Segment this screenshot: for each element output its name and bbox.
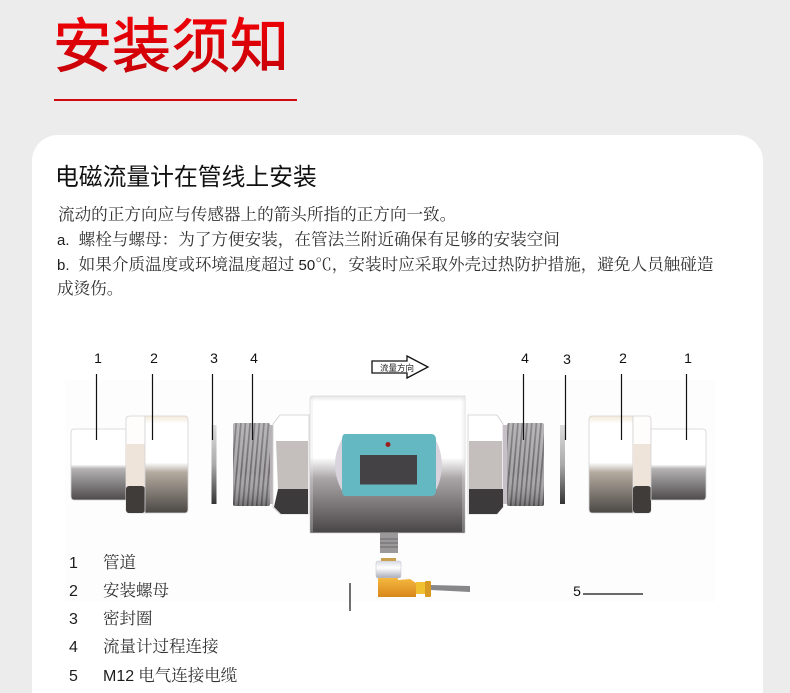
legend list: M12 电气连接电缆	[103, 666, 237, 685]
flow direction arrow: 流量方向	[380, 363, 414, 373]
flowmeter body	[310, 396, 465, 533]
panel: installation card	[32, 135, 763, 693]
text block: instructions: 流动的正方向应与传感器上的箭头所指的正方向一致。	[58, 205, 456, 224]
callout numbers: 5	[573, 583, 581, 599]
legend list: 安装螺母	[103, 581, 169, 600]
title underline	[54, 99, 297, 101]
legend list: 密封圈	[103, 609, 152, 628]
callout numbers: 2	[619, 350, 627, 366]
left thread and hex	[233, 415, 309, 514]
callout numbers: 4	[250, 350, 258, 366]
display panel	[335, 434, 442, 496]
left washer	[212, 425, 216, 504]
right nut and pipe	[589, 416, 706, 513]
right hex and thread	[468, 415, 544, 514]
callout numbers: 1	[94, 350, 102, 366]
callout numbers: 1	[684, 350, 692, 366]
legend list: 管道	[103, 553, 136, 572]
legend list: 流量计过程连接	[103, 637, 218, 656]
photo backdrop	[65, 380, 715, 602]
text block: instructions: a. 螺栓与螺母：为了方便安装，在管法兰附近确保有足够的安装空间	[57, 230, 560, 249]
text block: instructions: 成烫伤。	[57, 279, 123, 298]
callout numbers: 3	[210, 350, 218, 366]
text block: instructions	[57, 205, 713, 298]
panel heading: 电磁流量计在管线上安装	[55, 164, 317, 191]
callout numbers: 3	[563, 351, 571, 367]
legend list: 1	[69, 555, 78, 572]
callout numbers: 4	[521, 350, 529, 366]
legend list: 4	[69, 639, 78, 656]
callout numbers: 2	[150, 350, 158, 366]
right washer	[560, 425, 565, 504]
left pipe and nut	[71, 416, 188, 513]
legend list: 2	[69, 583, 78, 600]
title: 安装须知	[53, 14, 289, 80]
text block: instructions: b. 如果介质温度或环境温度超过 50℃，安装时应采取外壳过热防护措施，避免人员触碰造	[57, 255, 713, 274]
flow direction arrow	[372, 356, 428, 378]
callout numbers	[94, 350, 692, 599]
callout lines	[96, 374, 686, 611]
legend list: 3	[69, 611, 78, 628]
legend list: 5	[69, 668, 78, 685]
legend list	[69, 553, 237, 685]
diagram: exploded flowmeter assembly	[70, 350, 706, 611]
M12 connector and cable	[376, 533, 470, 597]
